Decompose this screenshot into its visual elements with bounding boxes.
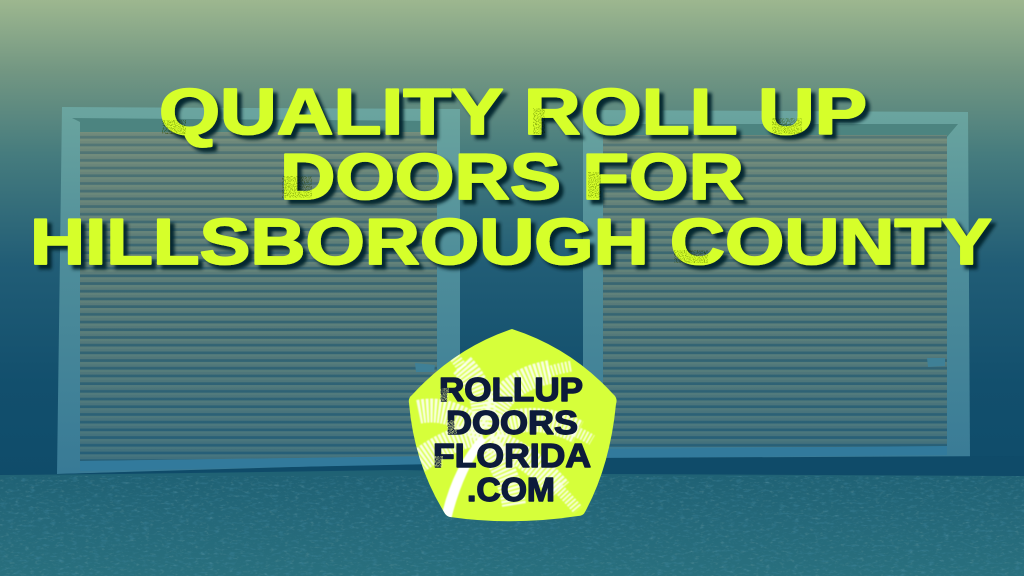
icon: palm tree: [418, 350, 592, 520]
left door latch: [415, 363, 435, 372]
right roll up door: [583, 110, 970, 458]
palm frond tips: [448, 350, 592, 510]
left door sill: [80, 456, 437, 471]
right door tint: [603, 135, 947, 447]
logo badge: [409, 329, 617, 521]
title distress speckles: [162, 108, 802, 263]
left door opening shadow: [72, 118, 437, 134]
palm fronds wide barbs: [418, 365, 578, 505]
title line 1: QUALITY ROLL UP: [159, 75, 867, 148]
logo line florida: FLORIDA: [433, 437, 591, 474]
logo line rollup: ROLLUP: [439, 371, 583, 408]
grass ground: [0, 470, 1024, 576]
palm trunk: [441, 436, 486, 520]
right door slats: [603, 135, 947, 447]
right door latch: [927, 358, 945, 367]
logo text: [433, 371, 591, 508]
left door slats: [80, 132, 437, 461]
left door tint: [80, 132, 437, 461]
logo line com: .COM: [467, 471, 555, 508]
foundation shadow: [0, 456, 1024, 482]
left door frame: [57, 107, 460, 474]
right door frame: [583, 110, 970, 458]
title: [30, 75, 992, 278]
left roll up door: [57, 107, 460, 474]
logo line doors: DOORS: [446, 404, 578, 441]
logo distress speckles: [434, 388, 457, 467]
right door sill: [603, 446, 947, 458]
right door opening shadow: [603, 124, 958, 137]
title line 2: DOORS FOR: [280, 140, 744, 213]
title line 3: HILLSBOROUGH COUNTY: [30, 205, 992, 278]
badge shape: [409, 329, 617, 521]
